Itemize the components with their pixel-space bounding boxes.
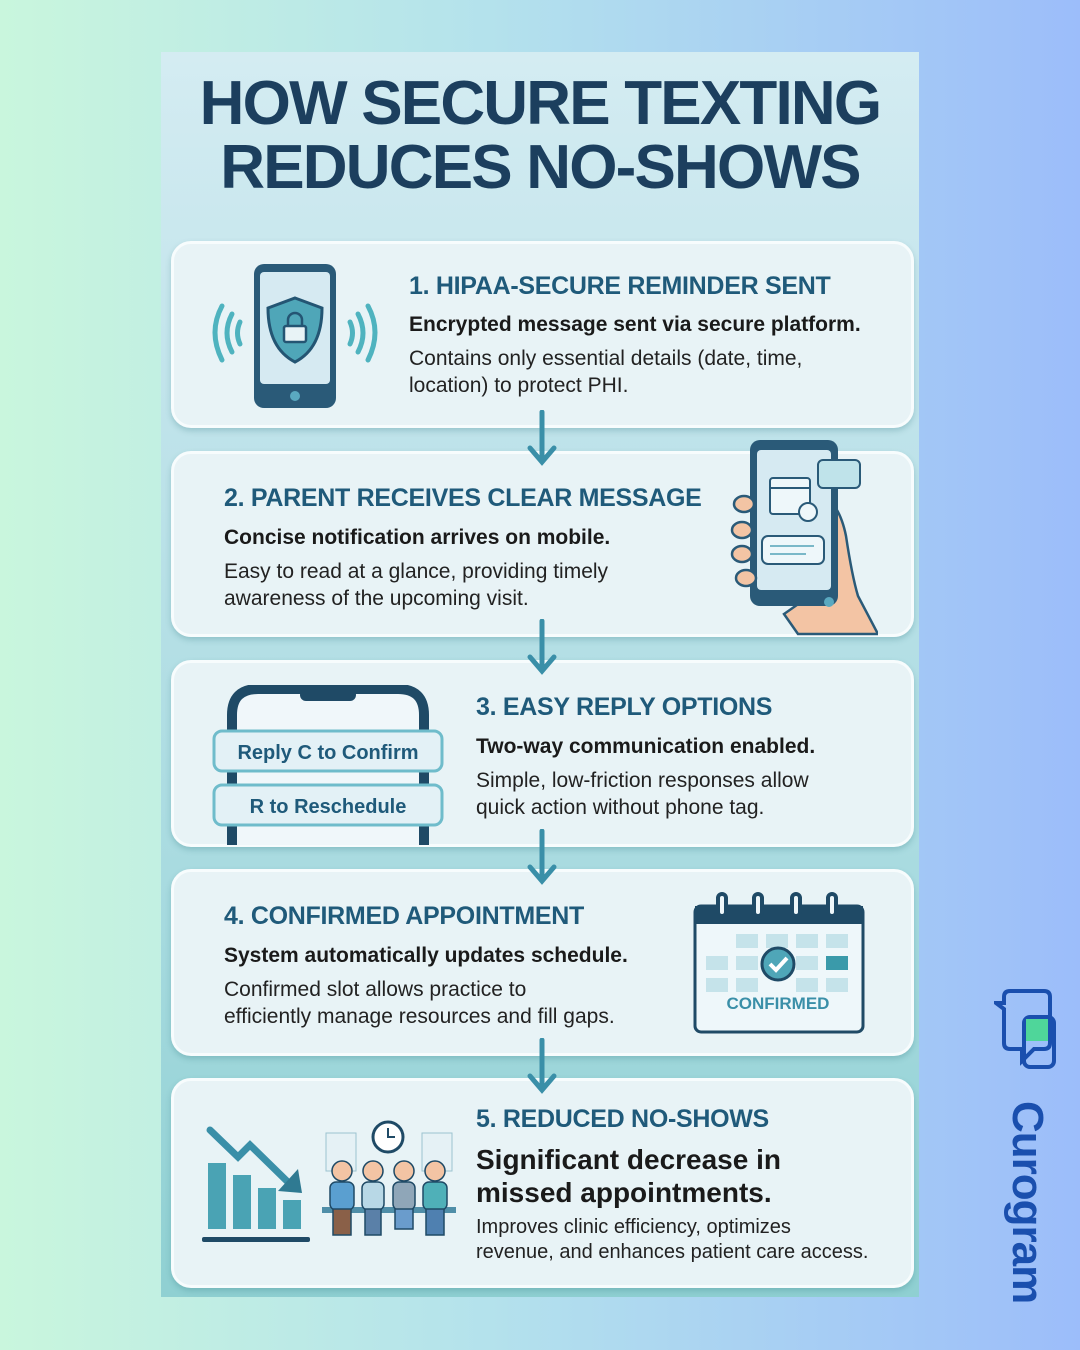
- icon: chat bubbles: [994, 989, 1056, 1069]
- panel: step 5: Improves clinic efficiency, optimizes: [476, 1216, 791, 1238]
- panel: step 1: Contains only essential details (date, time,: [409, 347, 802, 370]
- panel: step 5: 5. REDUCED NO-SHOWS: [476, 1105, 769, 1133]
- arrow 4: [528, 1038, 556, 1094]
- title: HOW SECURE TEXTING: [200, 69, 880, 138]
- icon: confirmed calendar: CONFIRMED: [727, 994, 829, 1013]
- arrow 1: [528, 410, 556, 466]
- panel: step 2: Easy to read at a glance, providing timely: [224, 560, 608, 583]
- panel: step 1: [171, 241, 914, 428]
- panel: step 4: [171, 869, 914, 1056]
- panel: step 3: quick action without phone tag.: [476, 796, 764, 819]
- panel: step 5: Significant decrease in: [476, 1144, 781, 1175]
- icon: phone with reply buttons: R to Reschedule: [250, 796, 406, 818]
- panel: main background: [161, 52, 919, 1297]
- arrow 2: [528, 619, 556, 675]
- icon: confirmed calendar: [694, 892, 864, 1034]
- panel: step 4: Confirmed slot allows practice to: [224, 978, 526, 1001]
- panel: step 4: 4. CONFIRMED APPOINTMENT: [224, 902, 584, 930]
- icon: phone with reply buttons: [212, 685, 444, 845]
- icon: declining bar chart: [202, 1126, 310, 1242]
- panel: step 5: [171, 1078, 914, 1288]
- icon: phone with reply buttons: Reply C to Confirm: [237, 742, 419, 764]
- panel: step 2: Concise notification arrives on mobile.: [224, 526, 610, 549]
- panel: step 5: revenue, and enhances patient care access.: [476, 1241, 868, 1263]
- panel: step 2: [171, 451, 914, 637]
- brand name: Curogram: [1003, 1101, 1052, 1303]
- icon: hand holding phone: [730, 440, 878, 636]
- logo: Curogram: [994, 989, 1056, 1303]
- panel: step 2: 2. PARENT RECEIVES CLEAR MESSAGE: [224, 484, 702, 512]
- panel: step 2: awareness of the upcoming visit.: [224, 587, 529, 610]
- panel: step 3: [171, 660, 914, 847]
- panel: step 1: Encrypted message sent via secure platform.: [409, 313, 861, 336]
- heading 1: 1. HIPAA-SECURE REMINDER SENT: [409, 272, 830, 300]
- panel: step 3: 3. EASY REPLY OPTIONS: [476, 693, 772, 721]
- panel: step 4: efficiently manage resources and fill gaps.: [224, 1005, 615, 1028]
- panel: step 5: missed appointments.: [476, 1177, 772, 1208]
- panel: step 4: System automatically updates schedule.: [224, 944, 628, 967]
- icon: secure phone: [212, 264, 378, 408]
- panel: step 3: Two-way communication enabled.: [476, 735, 815, 758]
- title: REDUCES NO-SHOWS: [220, 133, 860, 202]
- panel: step 3: Simple, low-friction responses allow: [476, 769, 809, 792]
- panel: step 1: location) to protect PHI.: [409, 374, 628, 397]
- icon: waiting room patients: [322, 1120, 456, 1236]
- title: [200, 69, 880, 202]
- arrow 3: [528, 829, 556, 885]
